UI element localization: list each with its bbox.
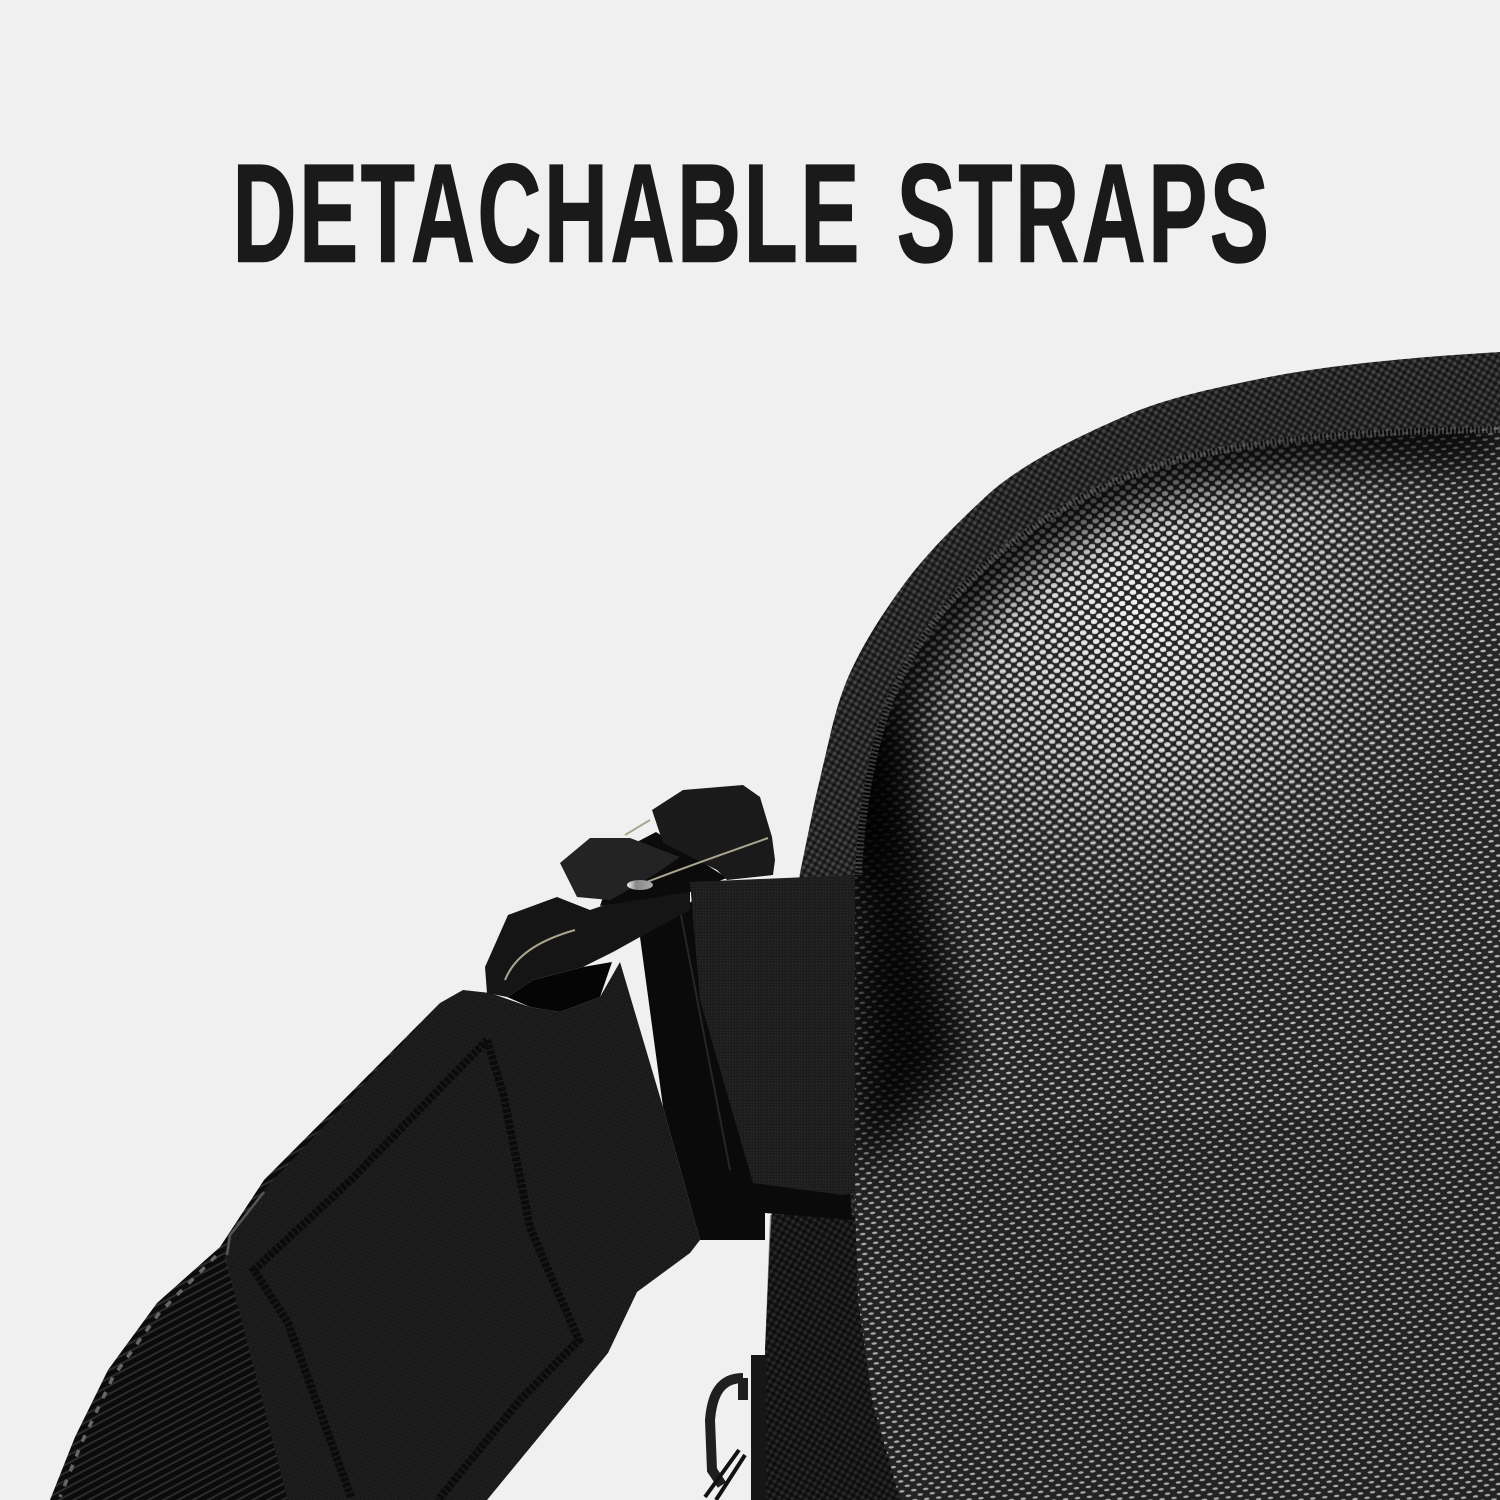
metal wire highlight [627, 880, 653, 890]
stitching [254, 1040, 579, 1500]
bag body [765, 352, 1500, 1500]
buckle frame [640, 880, 852, 1240]
pad edge highlight [227, 1192, 264, 1255]
bag piping edge [765, 352, 1500, 1500]
strap opening [507, 962, 612, 1012]
lower clip knob [560, 838, 680, 900]
strap tab [690, 875, 855, 1195]
buckle [485, 785, 852, 1240]
metal wire [505, 820, 768, 980]
webbing strap [50, 1003, 440, 1500]
hook curve [710, 1378, 743, 1485]
buckle frame groove [680, 910, 730, 1170]
neoprene strap end [225, 962, 700, 1500]
zipper pull [705, 1450, 745, 1500]
webbing edge stitching [60, 1256, 216, 1497]
buckle arm [485, 883, 690, 997]
bag textured shell [840, 420, 1500, 1500]
lower side panel shade [765, 1215, 902, 1500]
zipper hook [705, 1355, 766, 1500]
hook bar [751, 1355, 766, 1500]
webbing ribs [50, 1003, 440, 1500]
neoprene pad [225, 962, 700, 1500]
upper clip knob [652, 785, 775, 880]
knob base shadow [600, 832, 727, 906]
